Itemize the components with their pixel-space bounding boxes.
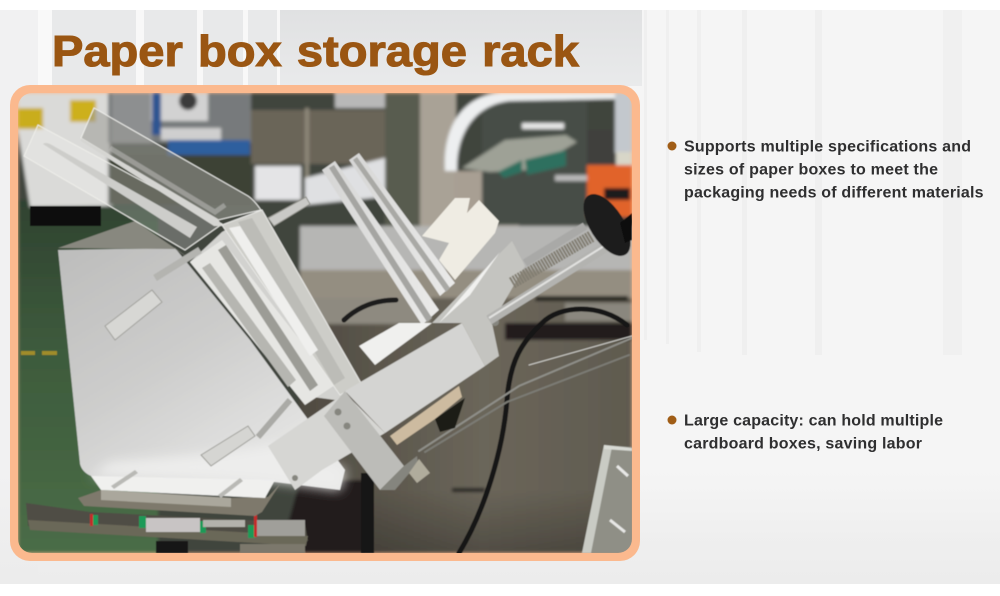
title: Paper box storage rack <box>52 26 580 76</box>
feature text: Supports multiple specifications and <box>684 138 971 156</box>
vertical black pole <box>361 473 374 553</box>
right side block <box>268 241 525 490</box>
factory background <box>18 92 632 553</box>
feature text: sizes of paper boxes to meet the <box>684 162 938 178</box>
base plate <box>78 484 280 516</box>
photo frame: machine storage rack <box>10 85 640 561</box>
bullet dot <box>668 416 676 424</box>
feature text: cardboard boxes, saving labor <box>684 436 922 452</box>
bullet: large capacity <box>668 412 943 452</box>
bullet: paper box specifications <box>668 138 984 202</box>
acrylic panel lower right <box>582 445 632 553</box>
linear rail <box>26 503 308 553</box>
aluminium guide frame <box>190 210 361 405</box>
black redaction block <box>30 206 101 226</box>
feature text: Large capacity: can hold multiple <box>684 412 943 430</box>
bullet dot <box>668 142 676 150</box>
acrylic guide plates <box>24 108 261 250</box>
feature text <box>684 412 943 452</box>
feature text <box>684 138 984 202</box>
cables <box>344 300 632 553</box>
feature text: packaging needs of different materials <box>684 184 984 202</box>
threaded rod and knob <box>489 186 640 320</box>
adjusting clamps <box>105 197 310 498</box>
silver box body <box>58 221 345 498</box>
white fork guides <box>322 153 499 325</box>
floor marking <box>21 351 57 355</box>
photo illustration <box>18 92 640 553</box>
orange rounded frame <box>10 85 640 561</box>
